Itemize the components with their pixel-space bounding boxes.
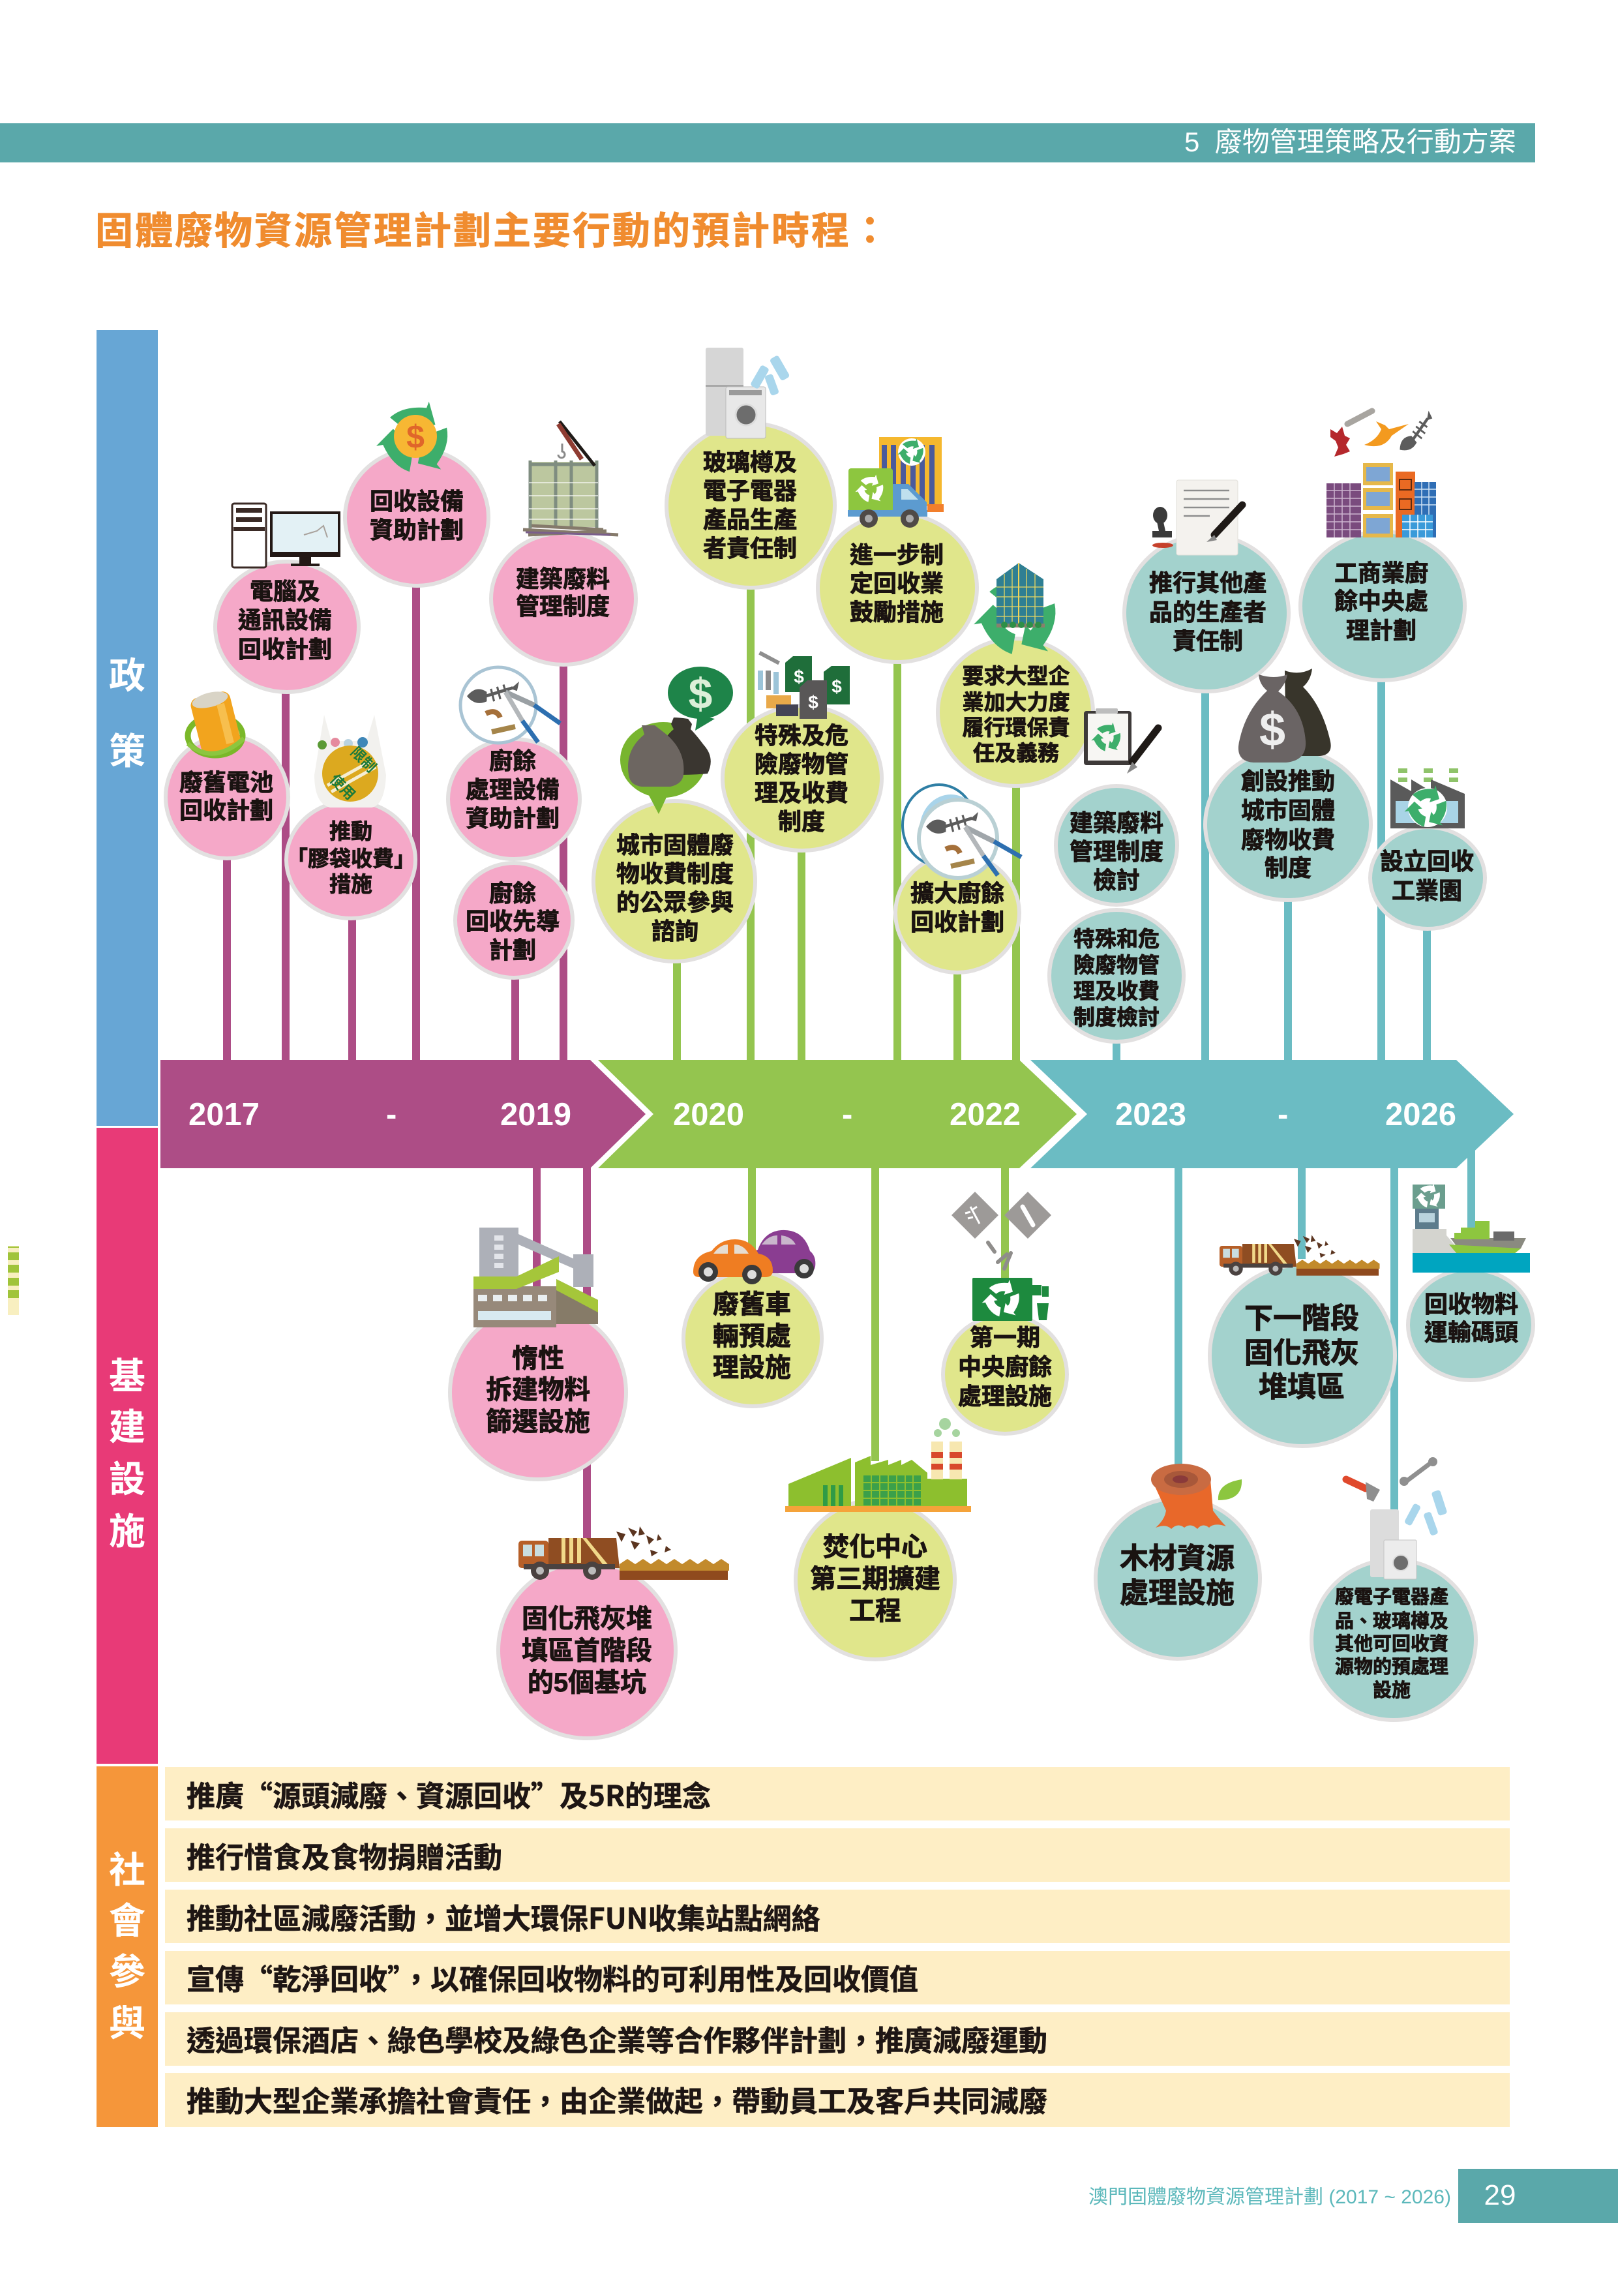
row text 3: 推動社區減廢活動，並增大環保FUN收集站點網絡 [187, 1896, 820, 1937]
bubble text: recycling incentives: 定回收業 [850, 570, 944, 596]
section label: infrastructure: 基 [109, 1355, 145, 1397]
bubble text: hazardous waste: 制度 [778, 808, 825, 835]
arrow 2023-2026 [1030, 1060, 1514, 1168]
bubble text: recycling incentives: 進一步制 [850, 541, 944, 567]
bubble text: vehicle pretreatment: 廢舊車 [713, 1290, 791, 1319]
section label: infrastructure: 設 [109, 1458, 145, 1500]
row text 2: 推行惜食及食物捐贈活動 [187, 1834, 502, 1876]
section label: social participation: 社 [109, 1850, 145, 1890]
icon: recycling coin [373, 402, 460, 479]
row text 5: 透過環保酒店、綠色學校及綠色企業等合作夥伴計劃，推廣減廢運動 [187, 2017, 1047, 2059]
bubble text: charging system: 廢物收費 [1241, 826, 1335, 853]
year labels: 2022 [950, 1097, 1021, 1132]
icon: clipboard and pen [1084, 708, 1158, 774]
bubble text: food waste pilot: 廚餘 [489, 879, 536, 907]
icon: contract with stamp and pen [1152, 480, 1242, 555]
bubble text: public consultation: 諮詢 [652, 917, 698, 944]
left margin marker [8, 1246, 19, 1315]
bubble text: next fly ash landfill: 下一階段 [1244, 1302, 1359, 1335]
icon: computer [232, 504, 339, 567]
icon: tree stump [1151, 1464, 1242, 1529]
arrow 2020-2022 [598, 1060, 1077, 1168]
bubble text: e-waste pretreatment: 廢電子電器產 [1335, 1586, 1448, 1608]
bubble text: construction waste: 建築廢料 [516, 565, 610, 592]
icon: tools and appliances [1346, 1457, 1448, 1579]
timeline arrow bar [160, 1060, 1514, 1168]
icon: hazardous waste jerry cans: $ [831, 676, 842, 697]
icon: recycling coin: $ [406, 419, 425, 455]
bubble text: hazardous waste review: 特殊和危 [1073, 926, 1160, 951]
bubble text: expand food waste: 擴大廚餘 [910, 879, 1004, 907]
bubble text: vehicle pretreatment: 理設施 [713, 1353, 791, 1382]
icon: waste bags with speech bubbles [620, 667, 733, 814]
bubble text: wood facility: 處理設施 [1120, 1577, 1235, 1609]
icon: stacked plates with fish bone [903, 785, 1021, 878]
icon: plastic bag [314, 715, 386, 808]
section label: policy [97, 330, 158, 1126]
bubble text: recycling industrial park: 工業園 [1392, 877, 1462, 904]
bubble text: plastic bag charge: 推動 [329, 819, 372, 843]
bubble text: expand food waste: 回收計劃 [910, 908, 1004, 935]
row text 6: 推動大型企業承擔社會責任，由企業做起，帶動員工及客戶共同減廢 [187, 2078, 1047, 2120]
panel: social participation rows [165, 1767, 1510, 2127]
bubble text: incinerator phase 3: 第三期擴建 [810, 1565, 940, 1594]
bubble text: hazardous waste: 特殊及危 [755, 721, 848, 749]
icon: plastic bag: 限制 [348, 744, 380, 776]
bubble text: construction waste review: 管理制度 [1070, 838, 1163, 865]
section label: infrastructure: 施 [109, 1511, 145, 1552]
icon: fly ash truck [518, 1526, 729, 1580]
section label: social participation: 參 [109, 1952, 145, 1992]
bubble text: e-waste pretreatment: 設施 [1373, 1680, 1411, 1701]
bubble text: wood facility: 木材資源 [1120, 1542, 1235, 1575]
year labels [188, 1097, 1456, 1132]
bubble text: producer responsibility: 電子電器 [703, 477, 797, 504]
footer [1088, 2169, 1618, 2223]
bubble text: inert material sorting: 拆建物料 [486, 1376, 590, 1404]
bubble text: hazardous waste review: 制度檢討 [1073, 1004, 1160, 1029]
bubble text: large enterprise duty: 要求大型企 [963, 664, 1070, 687]
bubble text: computer recycling: 回收計劃 [238, 635, 332, 663]
icon: plate with fish bone [460, 667, 560, 743]
bubble text: charging system: 制度 [1265, 854, 1311, 881]
bubble text: food waste equipment: 處理設備 [466, 776, 560, 802]
bubble text: public consultation: 城市固體廢 [616, 831, 734, 858]
row text 1: 推廣“源頭減廢、資源回收”及5R的理念 [187, 1773, 711, 1815]
bubble text: central food waste: 第一期 [970, 1324, 1040, 1350]
icon: fridge, washer and bottles [706, 348, 790, 438]
icon: city buildings [1326, 463, 1436, 537]
bubble text: charging system: 創設推動 [1241, 767, 1335, 794]
panel: 2020-2022 policy bubbles [593, 423, 1093, 973]
panel: infrastructure bubbles [450, 1265, 1533, 1738]
year labels: 2017 [188, 1097, 260, 1132]
footer text: 澳門固體廢物資源管理計劃 (2017 ~ 2026) [1088, 2186, 1451, 2208]
section label: infrastructure: 建 [109, 1406, 145, 1448]
bubble text: hazardous waste: 險廢物管 [755, 750, 848, 778]
bubble text: computer recycling: 通訊設備 [238, 607, 332, 633]
bubble text: commercial food waste: 工商業廚 [1334, 560, 1428, 586]
year labels: 2023 [1115, 1097, 1186, 1132]
row text 4: 宣傳“乾淨回收”，以確保回收物料的可利用性及回收價值 [187, 1956, 918, 1998]
bubble text: other products EPR: 責任制 [1173, 627, 1243, 654]
bubble text: food waste pilot: 計劃 [489, 937, 536, 963]
panel: 2023-2026 policy bubbles [1049, 532, 1485, 1042]
bubble text: inert material sorting: 惰性 [512, 1344, 564, 1373]
bubble text: central food waste: 中央廚餘 [958, 1353, 1052, 1380]
bubble text: battery recycling: 回收計劃 [179, 797, 273, 823]
bubble text: inert material sorting: 篩選設施 [486, 1408, 590, 1436]
bubble text: construction waste review: 檢討 [1093, 866, 1140, 894]
bubble text: next fly ash landfill: 堆填區 [1259, 1371, 1345, 1402]
icon: hazardous waste jerry cans: $ [808, 692, 818, 712]
section label: social participation: 與 [109, 2002, 145, 2044]
section label: policy: 政 [109, 655, 145, 697]
bubble text: large enterprise duty: 履行環保責 [963, 715, 1070, 740]
title: 固體廢物資源管理計劃主要行動的預計時程： [95, 210, 891, 252]
section label: social participation [97, 1766, 158, 2127]
bubble text: e-waste pretreatment: 品、玻璃樽及 [1335, 1610, 1448, 1632]
bubble text: recycling industrial park: 設立回收 [1380, 848, 1474, 874]
bubble text: other products EPR: 推行其他產 [1149, 569, 1266, 596]
header band [0, 123, 1535, 162]
year labels: - [1278, 1097, 1288, 1132]
bubble text: food waste pilot: 回收先導 [466, 908, 560, 934]
bubble text: producer responsibility: 玻璃樽及 [703, 449, 797, 475]
icon: food waste recycling bin [972, 1278, 1049, 1321]
bubble text: fly ash landfill: 固化飛灰堆 [522, 1605, 652, 1633]
icon: plastic bag: 使用 [327, 771, 359, 803]
bubble text: construction waste review: 建築廢料 [1070, 809, 1163, 836]
bubble text: recycling incentives: 鼓勵措施 [850, 599, 944, 625]
icon: sorting factory [473, 1228, 598, 1327]
icon: waste bags with speech bubbles: $ [689, 669, 712, 718]
icon: next phase truck [1220, 1235, 1380, 1276]
bubble text: large enterprise duty: 任及義務 [973, 741, 1059, 764]
icon: recycling truck and building [848, 437, 944, 528]
bubble text: commercial food waste: 餘中央處 [1334, 587, 1428, 614]
bubble text: fly ash landfill: 填區首階段 [522, 1637, 652, 1665]
icon: construction crane and building [523, 421, 618, 535]
bubble text: fly ash landfill: 的5個基坑 [528, 1669, 646, 1697]
icon: food waste signs [951, 1192, 1051, 1269]
page number: 29 [1484, 2179, 1516, 2211]
icon: battery [188, 688, 244, 755]
bubble text: plastic bag charge: 「膠袋收費」 [286, 847, 415, 870]
bubble text: hazardous waste: 理及收費 [755, 779, 848, 806]
icon: hazardous waste jerry cans: $ [794, 667, 804, 687]
icon: food waste scraps [1330, 411, 1441, 457]
icon: recycling factory [1390, 768, 1465, 832]
year labels: 2026 [1385, 1097, 1456, 1132]
bubble text: large enterprise duty: 業加大力度 [963, 690, 1070, 714]
bubble text: charging system: 城市固體 [1241, 797, 1335, 823]
bubble text: central food waste: 處理設施 [958, 1383, 1052, 1409]
bubble text: recycling wharf: 運輸碼頭 [1424, 1319, 1518, 1345]
bubble text: incinerator phase 3: 焚化中心 [823, 1533, 927, 1562]
bubble text: next fly ash landfill: 固化飛灰 [1244, 1337, 1359, 1368]
bubble text: hazardous waste review: 理及收費 [1073, 978, 1160, 1003]
icon: recycling wharf [1413, 1183, 1530, 1273]
icon: office tower with recycling arrows [970, 563, 1070, 663]
section label: infrastructure [97, 1128, 158, 1764]
year labels: - [386, 1097, 397, 1132]
panel: 2017-2019 policy bubbles [166, 449, 636, 978]
bubble text: battery recycling: 廢舊電池 [179, 768, 273, 796]
bubble text: construction waste: 管理制度 [516, 592, 610, 620]
arrow 2017-2019 [160, 1060, 646, 1168]
bubble text: producer responsibility: 產品生產 [703, 506, 797, 532]
bubble text: incinerator phase 3: 工程 [849, 1597, 901, 1625]
timeline stems [223, 581, 1475, 1539]
bubble text: computer recycling: 電腦及 [250, 578, 320, 604]
bubble text: other products EPR: 品的生產者 [1149, 599, 1266, 625]
bubble text: commercial food waste: 理計劃 [1346, 617, 1416, 643]
bubble text: vehicle pretreatment: 輛預處 [713, 1322, 791, 1351]
bubble text: hazardous waste review: 險廢物管 [1073, 952, 1160, 977]
bubble text: food waste equipment: 廚餘 [489, 748, 536, 774]
icon: incineration plant [785, 1418, 971, 1512]
bubble text: recycling equipment subsidy: 回收設備 [370, 488, 464, 514]
year labels: - [842, 1097, 852, 1132]
bubble text: public consultation: 的公眾參與 [616, 888, 734, 916]
icon: hazardous waste jerry cans [758, 651, 850, 719]
bubble text: plastic bag charge: 措施 [329, 871, 372, 896]
bubble text: e-waste pretreatment: 其他可回收資 [1335, 1633, 1448, 1655]
bubble text: recycling equipment subsidy: 資助計劃 [370, 517, 464, 543]
icon: money bags [1238, 669, 1331, 763]
bubble text: producer responsibility: 者責任制 [703, 535, 797, 561]
bubble text: recycling wharf: 回收物料 [1424, 1290, 1518, 1318]
year labels: 2020 [673, 1097, 744, 1132]
year labels: 2019 [500, 1097, 571, 1132]
section label: policy: 策 [109, 731, 145, 772]
icon: money bags: $ [1259, 704, 1285, 756]
section label: social participation: 會 [109, 1901, 145, 1941]
bubble text: public consultation: 物收費制度 [616, 860, 734, 887]
bubble text: food waste equipment: 資助計劃 [466, 805, 560, 831]
header text: 5 廢物管理策略及行動方案 [1184, 127, 1516, 157]
icon: old cars [693, 1230, 815, 1284]
bubble text: e-waste pretreatment: 源物的預處理 [1335, 1656, 1448, 1678]
